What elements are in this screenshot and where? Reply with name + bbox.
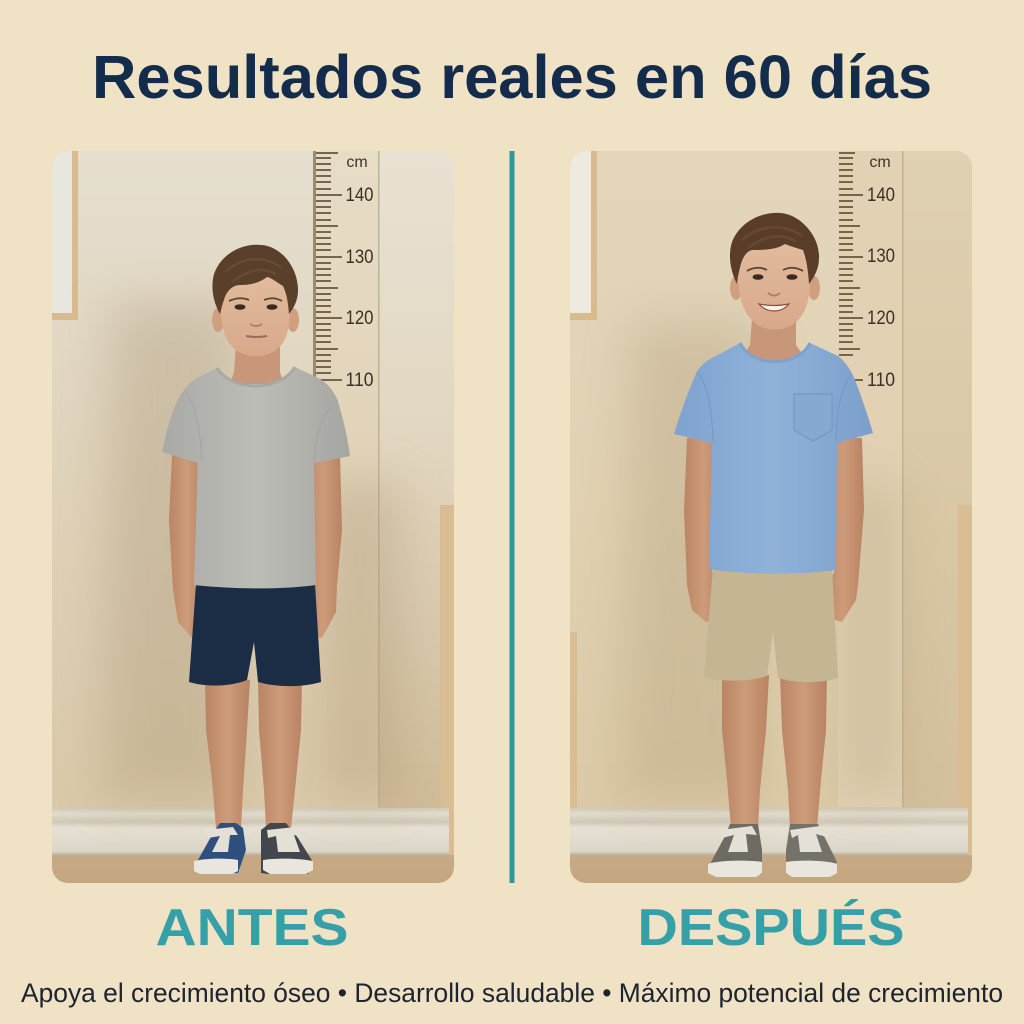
head [738, 240, 810, 330]
hair highlights [742, 227, 802, 248]
panel: despues photo [570, 151, 972, 883]
floor [570, 855, 972, 883]
shoes [194, 823, 313, 874]
t-shirt [162, 367, 350, 588]
legs [722, 675, 827, 828]
legs [205, 680, 302, 828]
child: despues [674, 213, 873, 877]
wall [52, 151, 379, 808]
height ruler: 130 [867, 246, 895, 267]
wood furniture edges [570, 505, 972, 860]
wall side area [903, 151, 972, 811]
label: antes: ANTES [156, 899, 348, 957]
face [747, 268, 803, 311]
face [229, 298, 282, 337]
child shadow [100, 300, 400, 800]
pocket [794, 394, 832, 441]
wall side area [379, 650, 440, 808]
height ruler [838, 151, 904, 807]
floor [52, 855, 454, 883]
shorts [704, 568, 838, 682]
picture frame [52, 151, 78, 320]
arms [684, 438, 864, 622]
title: Resultados reales en 60 días [92, 43, 932, 111]
sleeve seams [697, 372, 851, 442]
sleeve seams [186, 392, 338, 462]
shoes [708, 824, 837, 877]
collar [740, 343, 810, 362]
picture frame [570, 151, 597, 320]
skirting board [570, 808, 968, 855]
arms [169, 455, 342, 638]
height ruler: 110 [867, 370, 895, 391]
height ruler [313, 151, 380, 807]
skirting board [52, 808, 449, 855]
height ruler: cm [346, 154, 368, 171]
child shadow [620, 320, 900, 800]
ears [212, 308, 299, 332]
height ruler: 130 [346, 247, 374, 268]
height ruler: 120 [346, 308, 374, 329]
shorts [189, 584, 321, 686]
hair highlights [225, 259, 282, 282]
wood furniture edge [440, 505, 454, 860]
height ruler: 120 [867, 308, 895, 329]
height ruler: 140 [867, 185, 895, 206]
hair [212, 245, 298, 314]
head [221, 274, 290, 356]
child: antes [162, 245, 350, 874]
divider [510, 151, 514, 883]
wall [570, 151, 903, 808]
label: despues: DESPUÉS [638, 899, 904, 957]
ears [730, 276, 820, 300]
height ruler: 110 [346, 370, 374, 391]
t-shirt [674, 343, 873, 574]
height ruler: 140 [346, 185, 374, 206]
collar [217, 367, 295, 386]
hair [730, 213, 819, 284]
benefits caption: Apoya el crecimiento óseo • Desarrollo saludable • Máximo potencial de crecimiento [21, 978, 1003, 1008]
height ruler: cm [869, 154, 891, 171]
neck [232, 346, 282, 384]
neck [747, 320, 801, 360]
panel: antes photo [52, 151, 454, 883]
